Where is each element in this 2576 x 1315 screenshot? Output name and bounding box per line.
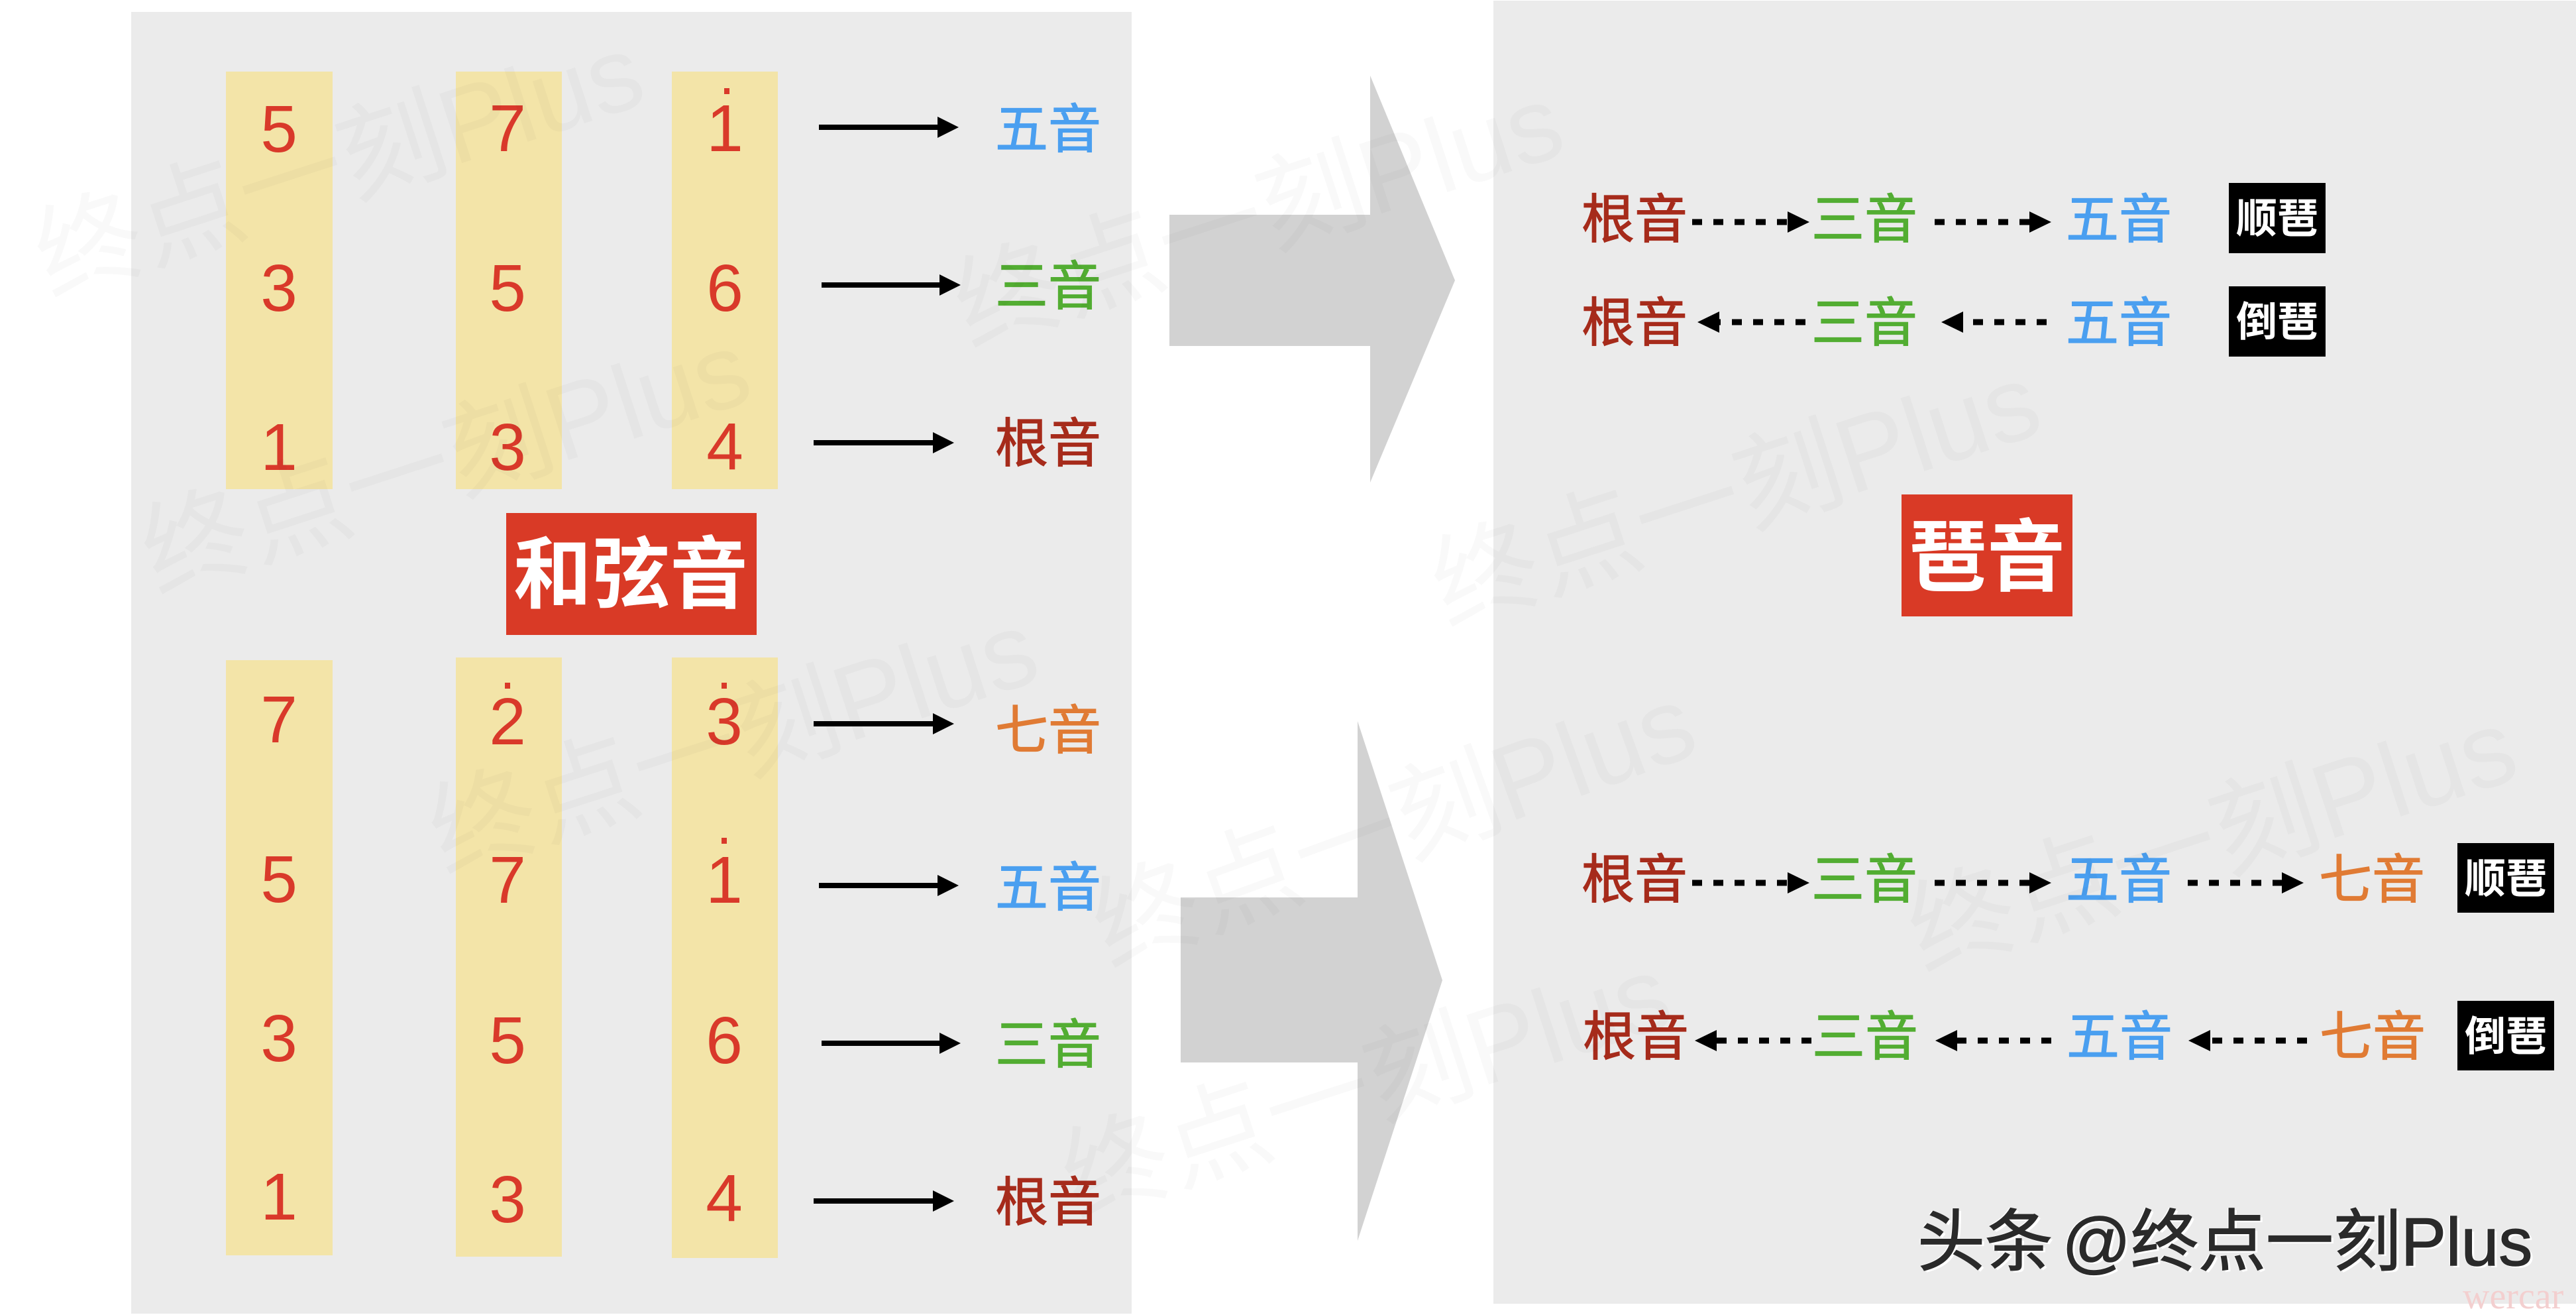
faint diagonal watermarks: 终点一刻Plus [415, 587, 1051, 895]
faint diagonal watermarks: 终点一刻Plus [127, 308, 763, 615]
heading: chord tones: 和弦音 [513, 532, 748, 619]
badge: ascending [2229, 183, 2326, 253]
seventh arrows and tone labels [814, 701, 1101, 1232]
column: seventh 1 3 5 7: 5 [260, 842, 297, 917]
column: triad 4 6 high 1: 1 [706, 91, 743, 166]
column: seventh 3 5 7 high 2: 2 [489, 685, 526, 759]
faint diagonal watermarks: 终点一刻Plus [1077, 661, 1710, 989]
heading: chord tones [506, 513, 757, 635]
badge: descending: 倒琶 [2465, 1014, 2547, 1060]
row: third [822, 1015, 1101, 1074]
column: triad 4 6 high 1 [672, 72, 778, 489]
seventh descending arpeggio row: 七音 [2320, 1007, 2426, 1066]
triad descending arpeggio row: 三音 [1811, 294, 1917, 353]
faint diagonal watermarks: 终点一刻Plus [1047, 932, 1684, 1239]
triad descending arpeggio row [1582, 286, 2326, 357]
source credit watermark: 头条 @终点一刻Plus [1917, 1204, 2532, 1280]
triad arrows and tone labels [814, 100, 1101, 473]
badge: descending: 倒琶 [2236, 300, 2318, 345]
faint diagonal watermarks: 终点一刻Plus [940, 61, 1576, 369]
faint diagonal watermarks: 终点一刻Plus [1417, 340, 2053, 648]
seventh descending arpeggio row: 五音 [2066, 1007, 2173, 1066]
triad descending arpeggio row: 五音 [2066, 294, 2172, 353]
row: third [822, 257, 1101, 316]
panel: arpeggio tones [1493, 1, 2576, 1304]
row: root [814, 414, 1101, 473]
triad ascending arpeggio row: 三音 [1811, 190, 1917, 249]
triad descending arpeggio row: 根音 [1582, 294, 1688, 353]
row: fifth [819, 858, 1101, 917]
column: triad 3 5 7 [456, 72, 562, 489]
row: third: 三音 [995, 1015, 1101, 1074]
column: seventh 4 6 high 1 high 3: 6 [706, 1003, 743, 1078]
arrow: seventh chords to arpeggio [1181, 721, 1442, 1241]
heading: arpeggio [1902, 494, 2072, 616]
seventh chord columns [226, 658, 778, 1258]
faint diagonal watermarks: 终点一刻Plus [1894, 685, 2530, 993]
column: triad 3 5 7: 7 [489, 91, 526, 166]
seventh ascending arpeggio row [1582, 843, 2554, 913]
column: seventh 4 6 high 1 high 3 [672, 658, 778, 1258]
column: seventh 3 5 7 high 2 [456, 658, 562, 1257]
heading: arpeggio: 琶音 [1909, 514, 2065, 602]
column: triad 3 5 7: 3 [489, 410, 526, 485]
row: root: 根音 [995, 1173, 1101, 1232]
column: seventh 3 5 7 high 2: 3 [489, 1163, 526, 1237]
row: seventh: 七音 [995, 701, 1101, 760]
triad ascending arpeggio row: 五音 [2066, 190, 2172, 249]
row: fifth: 五音 [995, 100, 1101, 159]
column: triad 1 3 5: 3 [260, 251, 297, 325]
panel: chord tones [131, 12, 1132, 1314]
column: seventh 1 3 5 7: 1 [260, 1160, 297, 1234]
triad ascending arpeggio row: 根音 [1582, 190, 1688, 249]
seventh descending arpeggio row [1583, 1001, 2554, 1070]
seventh ascending arpeggio row: 七音 [2319, 850, 2425, 909]
column: triad 3 5 7: 5 [489, 251, 526, 325]
badge: descending [2457, 1001, 2554, 1070]
column: seventh 4 6 high 1 high 3: 4 [706, 1161, 743, 1235]
column: triad 1 3 5 [226, 72, 333, 489]
row: fifth: 五音 [995, 858, 1101, 917]
column: seventh 1 3 5 7: 7 [260, 683, 297, 757]
seventh descending arpeggio row: 根音 [1583, 1007, 1689, 1066]
column: seventh 4 6 high 1 high 3: 3 [706, 685, 743, 759]
arrow: triad chords to arpeggio [1169, 76, 1455, 483]
badge: ascending: 顺琶 [2236, 196, 2318, 242]
seventh ascending arpeggio row: 根音 [1582, 850, 1688, 909]
seventh descending arpeggio row: 三音 [1812, 1007, 1918, 1066]
seventh ascending arpeggio row: 三音 [1811, 850, 1917, 909]
column: seventh 1 3 5 7 [226, 660, 333, 1255]
triad ascending arpeggio row [1582, 183, 2326, 253]
row: seventh [814, 701, 1101, 760]
triad chord columns [226, 72, 778, 489]
column: seventh 4 6 high 1 high 3: 1 [706, 843, 743, 917]
column: triad 4 6 high 1: 6 [706, 251, 743, 325]
column: triad 1 3 5: 1 [260, 410, 297, 485]
row: third: 三音 [995, 257, 1101, 316]
faint diagonal watermarks: 终点一刻Plus [21, 11, 657, 318]
column: seventh 1 3 5 7: 3 [260, 1001, 297, 1076]
column: triad 4 6 high 1: 4 [706, 410, 743, 484]
column: seventh 3 5 7 high 2: 7 [489, 843, 526, 917]
badge: ascending [2457, 843, 2554, 913]
badge: ascending: 顺琶 [2465, 856, 2547, 902]
row: fifth [819, 100, 1101, 159]
seventh ascending arpeggio row: 五音 [2066, 850, 2172, 909]
column: seventh 3 5 7 high 2: 5 [489, 1003, 526, 1078]
row: root: 根音 [995, 414, 1101, 473]
column: triad 1 3 5: 5 [260, 92, 297, 166]
badge: descending [2229, 286, 2326, 357]
row: root [814, 1173, 1101, 1232]
